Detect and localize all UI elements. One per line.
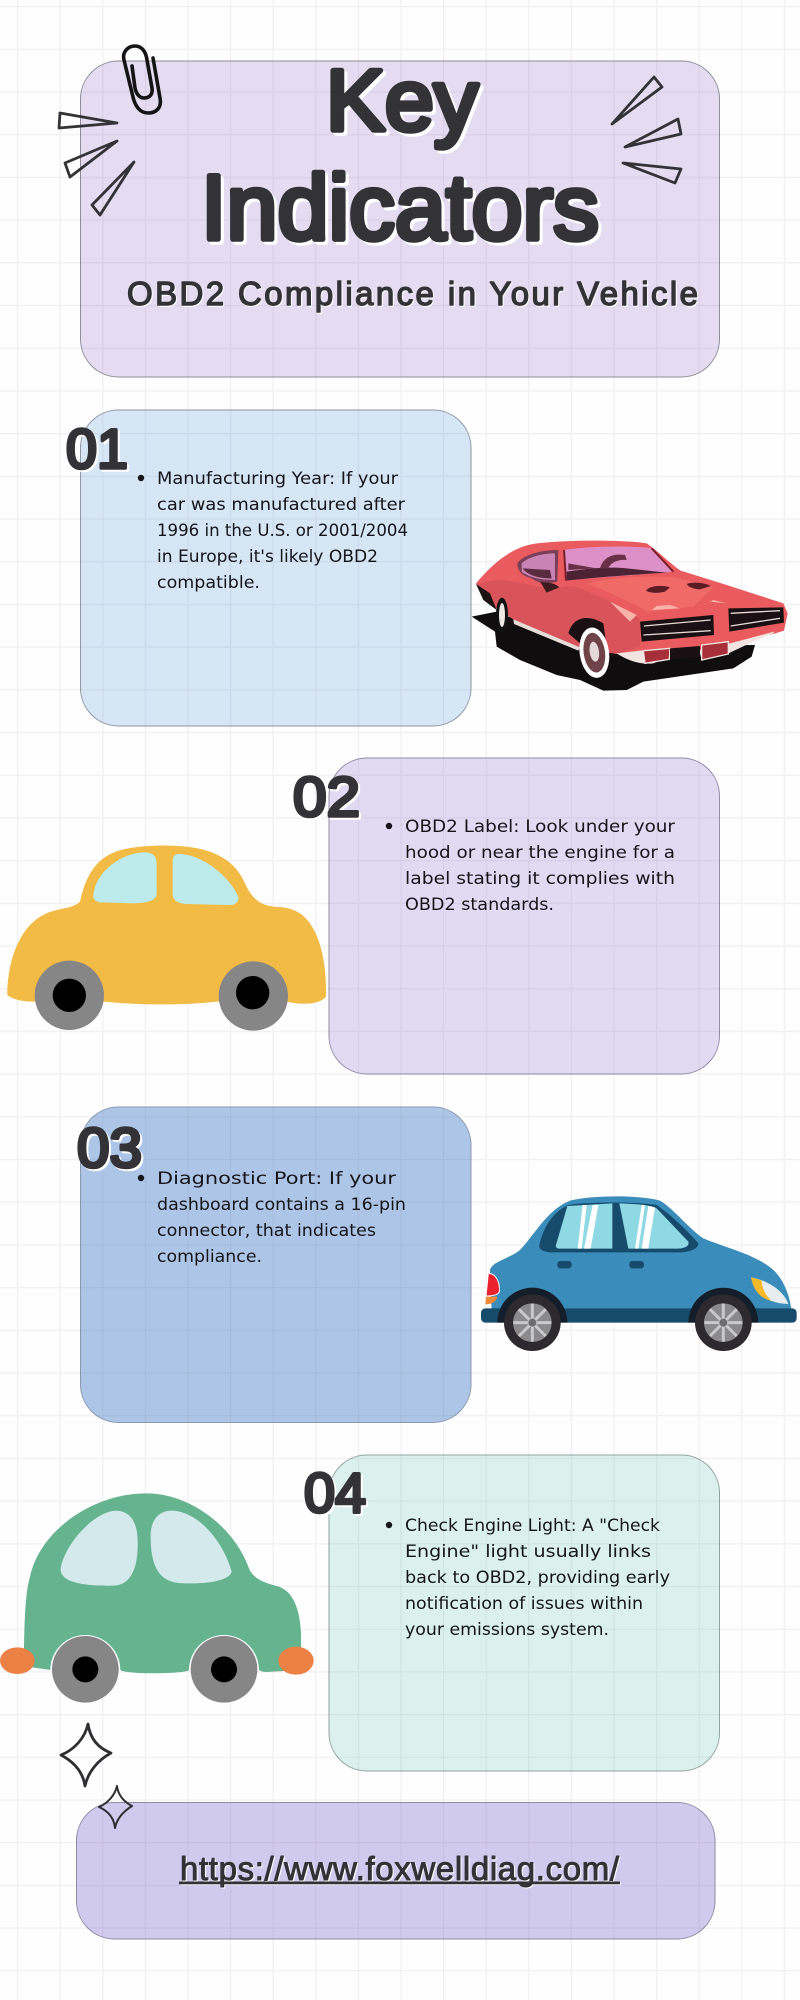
panel: check engine light [329, 1455, 720, 1771]
text: OBD2 label: OBD2 Label: Look under your [405, 817, 675, 837]
number 02: 02 [293, 765, 360, 828]
text: check engine light [386, 1516, 670, 1640]
text: OBD2 label: label stating it complies with [405, 869, 675, 889]
website link: https://www.foxwelldiag.com/ [180, 1850, 620, 1887]
text: manufacturing year [138, 469, 408, 593]
illustration: yellow car [7, 845, 326, 1031]
icon: paperclip [124, 46, 160, 113]
text: check engine light: your emissions system. [405, 1620, 609, 1640]
panel: manufacturing year [80, 410, 471, 726]
text: check engine light: Engine" light usually links [405, 1542, 651, 1562]
text: OBD2 label: OBD2 standards. [405, 895, 554, 915]
number 01: 01 [66, 417, 128, 480]
panel: diagnostic port [80, 1107, 471, 1422]
text: check engine light: Check Engine Light: A "Check [405, 1516, 660, 1536]
text: manufacturing year: Manufacturing Year: If your [157, 469, 398, 489]
text: check engine light: back to OBD2, providing early [405, 1568, 670, 1588]
icon: small sparkle [99, 1786, 132, 1828]
illustration: blue car [481, 1196, 797, 1351]
title: Indicators [201, 157, 599, 259]
text: diagnostic port: dashboard contains a 16-pin [157, 1195, 406, 1215]
text: diagnostic port [138, 1169, 406, 1267]
text: OBD2 label: hood or near the engine for a [405, 843, 675, 863]
illustration: green car [0, 1493, 314, 1703]
text: manufacturing year: 1996 in the U.S. or 2001/2004 [157, 521, 408, 541]
number 04: 04 [304, 1461, 366, 1524]
text: OBD2 label [386, 817, 675, 915]
icon: right burst [612, 77, 681, 183]
panel: OBD2 label [329, 758, 720, 1074]
text: check engine light: notification of issues within [405, 1594, 643, 1614]
number 03: 03 [77, 1116, 142, 1179]
title: Key [326, 53, 478, 149]
text: diagnostic port: connector, that indicates [157, 1221, 376, 1241]
text: diagnostic port: Diagnostic Port: If your [157, 1169, 396, 1189]
icon: large sparkle [61, 1724, 111, 1786]
text: manufacturing year: compatible. [157, 573, 260, 593]
title [201, 53, 599, 259]
text: manufacturing year: car was manufactured after [157, 495, 405, 515]
subtitle: OBD2 Compliance in Your Vehicle [127, 275, 698, 312]
panel: website footer [76, 1802, 715, 1939]
icon: left burst [59, 113, 134, 215]
text: manufacturing year: in Europe, it's likely OBD2 [157, 547, 378, 567]
text: diagnostic port: compliance. [157, 1247, 262, 1267]
illustration: red muscle car [472, 541, 788, 691]
panel: header [80, 61, 720, 377]
